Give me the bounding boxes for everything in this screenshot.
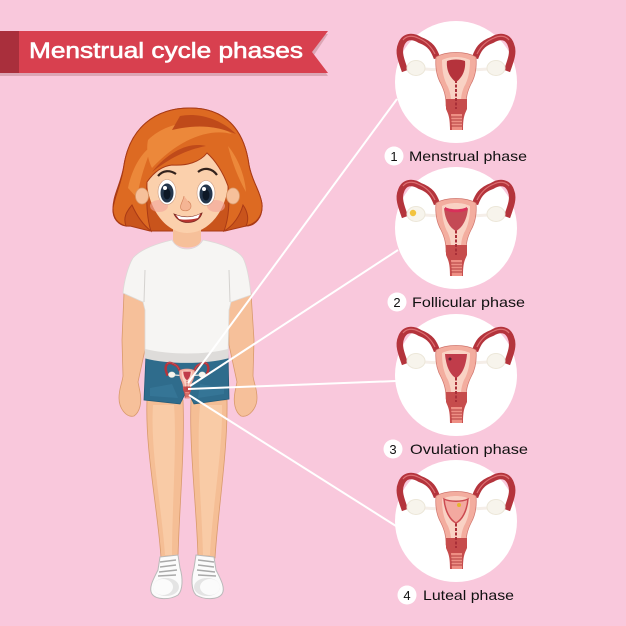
panel: menstrual phase (384, 21, 527, 166)
panel: follicular phase (388, 167, 525, 312)
mouth (174, 213, 202, 223)
legs (147, 400, 227, 558)
panel: luteal phase (395, 460, 517, 604)
shorts (144, 354, 229, 404)
ears (136, 188, 240, 204)
label 4: 4 (403, 588, 411, 603)
hair highlights (128, 123, 246, 198)
small uterus on figure (166, 363, 208, 398)
label 1: Menstrual phase (409, 148, 527, 164)
panel: ovulation phase (384, 314, 528, 458)
label 3: Ovulation phase (410, 441, 528, 457)
title banner (0, 31, 328, 76)
shirt (123, 240, 251, 362)
circle with uterus 3 (395, 314, 517, 436)
label 2: Follicular phase (412, 294, 525, 310)
label 2 (388, 292, 525, 312)
eyebrows (158, 169, 217, 176)
label 3: 3 (389, 442, 397, 457)
shoes (151, 555, 223, 599)
nose (180, 196, 191, 211)
label 4 (398, 586, 514, 604)
label 3 (384, 440, 528, 458)
label 1 (384, 146, 527, 166)
arms (119, 293, 257, 416)
face (147, 148, 228, 233)
label 4: Luteal phase (423, 587, 514, 603)
neck (173, 226, 201, 248)
eyes (158, 180, 215, 206)
circle with uterus 2 (395, 167, 517, 289)
circle with uterus 4 (395, 460, 517, 582)
circle with uterus 1 (395, 21, 517, 143)
label 1: 1 (390, 149, 398, 164)
pointer lines (188, 99, 398, 526)
label 2: 2 (393, 295, 401, 310)
hair back (113, 108, 262, 231)
girl figure (113, 108, 262, 599)
title: Menstrual cycle phases (29, 38, 303, 63)
hair front (113, 108, 262, 231)
cheeks (150, 200, 168, 212)
